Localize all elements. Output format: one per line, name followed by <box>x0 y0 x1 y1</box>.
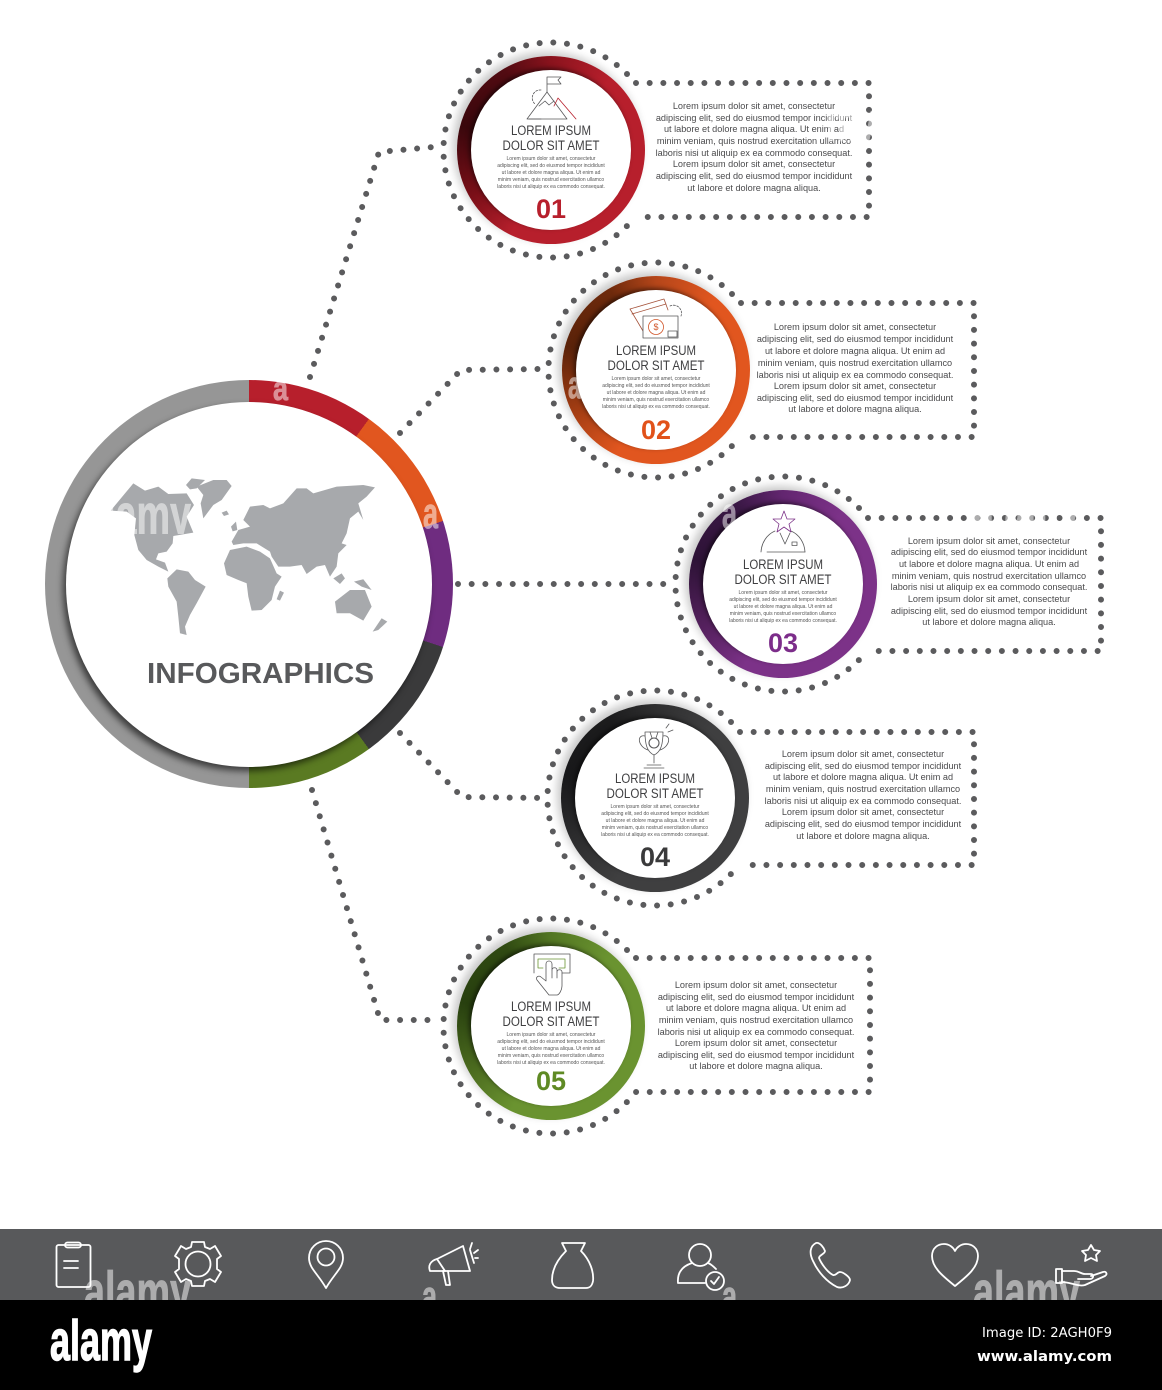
website: www.alamy.com <box>977 1349 1112 1365</box>
icon: phone <box>811 1243 850 1288</box>
icon: map pin <box>309 1241 343 1288</box>
side text 04 <box>765 749 962 841</box>
content 05 <box>497 954 855 1096</box>
title 05: LOREM IPSUM <box>511 999 591 1014</box>
description 05: ut labore et dolore magna aliqua. Ut enim ad <box>502 1046 601 1052</box>
watermarks on bar <box>84 1260 1080 1300</box>
title 01: LOREM IPSUM <box>511 123 591 138</box>
side text 05: minim veniam, quis nostrud exercitation ullamco <box>659 1015 853 1025</box>
side text 05: adipiscing elit, sed do eiusmod tempor incididunt <box>658 992 855 1002</box>
dotted outline 02 <box>546 260 977 480</box>
description 04: laboris nisi ut aliquip ex ea commodo consequat. <box>601 832 709 838</box>
centre 05 <box>471 946 631 1106</box>
watermark overlay: alamy <box>973 477 1080 541</box>
title 03: LOREM IPSUM <box>743 557 823 572</box>
title 05: DOLOR SIT AMET <box>502 1014 600 1029</box>
side text 03: ut labore et dolore magna aliqua. <box>922 617 1056 627</box>
content 01 <box>497 76 853 224</box>
hub title: INFOGRAPHICS <box>147 658 374 690</box>
side text 01: adipiscing elit, sed do eiusmod tempor incididunt <box>656 171 853 181</box>
watermark overlay: my <box>826 90 876 154</box>
number 05: 05 <box>536 1066 566 1096</box>
description 01 <box>497 156 605 190</box>
panel: step 05 <box>440 916 873 1136</box>
panel: central hub ring <box>45 380 453 788</box>
side text 03: laboris nisi ut aliquip ex ea commodo consequat. <box>891 582 1087 592</box>
description 05: adipiscing elit, sed do eiusmod tempor incididunt <box>497 1039 605 1045</box>
side text 04: laboris nisi ut aliquip ex ea commodo consequat. <box>765 796 961 806</box>
title 03 <box>734 557 832 587</box>
side text 02 <box>757 322 954 414</box>
side text 05: Lorem ipsum dolor sit amet, consectetur <box>675 1038 837 1048</box>
footer band <box>0 1300 1162 1390</box>
description 01: Lorem ipsum dolor sit amet, consectetur <box>507 156 596 162</box>
side text 04: ut labore et dolore magna aliqua. Ut enim ad <box>773 772 953 782</box>
icon: user with check <box>678 1244 724 1290</box>
ring 02 <box>562 276 750 464</box>
description 01: minim veniam, quis nostrud exercitation ullamco <box>498 177 604 183</box>
content 04 <box>601 724 962 872</box>
side text 02: Lorem ipsum dolor sit amet, consectetur <box>774 381 936 391</box>
icon: card and dollar <box>630 299 682 338</box>
description 02: ut labore et dolore magna aliqua. Ut enim ad <box>607 390 706 396</box>
bottom icon bar <box>0 1229 1162 1300</box>
icon: card and dollar: $ <box>653 322 659 332</box>
side text 05: ut labore et dolore magna aliqua. Ut enim ad <box>666 1003 846 1013</box>
dotted outline 04 <box>544 688 977 908</box>
side text 01: laboris nisi ut aliquip ex ea commodo consequat. <box>656 148 852 158</box>
description 02: adipiscing elit, sed do eiusmod tempor incididunt <box>602 383 710 389</box>
icon: money bag <box>552 1243 593 1288</box>
side text 03: ut labore et dolore magna aliqua. Ut enim ad <box>899 559 1079 569</box>
description 02: minim veniam, quis nostrud exercitation ullamco <box>603 397 709 403</box>
side text 01: ut labore et dolore magna aliqua. Ut enim ad <box>664 124 844 134</box>
side text 02: ut labore et dolore magna aliqua. Ut enim ad <box>765 346 945 356</box>
title 02: DOLOR SIT AMET <box>608 358 704 373</box>
icon: star and dome <box>761 511 805 552</box>
watermark overlay <box>111 110 1076 540</box>
content 03 <box>729 510 1088 658</box>
description 04: minim veniam, quis nostrud exercitation ullamco <box>602 825 708 831</box>
title 02 <box>608 343 704 373</box>
side text 02: minim veniam, quis nostrud exercitation ullamco <box>758 358 952 368</box>
bar icons <box>56 1240 1108 1291</box>
footer logo: alamy <box>50 1309 152 1373</box>
side text 01: ut labore et dolore magna aliqua. <box>687 183 821 193</box>
panel: step 03 <box>672 474 1104 694</box>
dotted outline 05 <box>440 916 873 1136</box>
title 04: LOREM IPSUM <box>615 771 695 786</box>
dotted outline 01 <box>440 40 872 260</box>
image id: Image ID: 2AGH0F9 <box>982 1326 1112 1341</box>
side text 01: minim veniam, quis nostrud exercitation ullamco <box>657 136 851 146</box>
icon: clipboard <box>56 1242 90 1287</box>
number 01: 01 <box>536 194 566 224</box>
centre 04 <box>575 718 735 878</box>
side text 01: Lorem ipsum dolor sit amet, consectetur <box>673 159 835 169</box>
side text 05: ut labore et dolore magna aliqua. <box>689 1061 823 1071</box>
description 04: ut labore et dolore magna aliqua. Ut enim ad <box>606 818 705 824</box>
ring 01 <box>457 56 645 244</box>
description 03: adipiscing elit, sed do eiusmod tempor incididunt <box>729 597 837 603</box>
centre 01 <box>471 70 631 230</box>
description 05: Lorem ipsum dolor sit amet, consectetur <box>507 1032 596 1038</box>
description 03: ut labore et dolore magna aliqua. Ut enim ad <box>734 604 833 610</box>
icon: hand on banknote <box>534 954 570 995</box>
side text 02: adipiscing elit, sed do eiusmod tempor incididunt <box>757 393 954 403</box>
ring 05 <box>457 932 645 1120</box>
number 03: 03 <box>768 628 798 658</box>
icon: megaphone <box>429 1243 478 1285</box>
icon: heart <box>932 1244 978 1286</box>
side text 02: laboris nisi ut aliquip ex ea commodo consequat. <box>757 370 953 380</box>
side text 01 <box>656 101 853 193</box>
side text 04: ut labore et dolore magna aliqua. <box>796 831 930 841</box>
hub white centre <box>66 402 432 767</box>
description 01: laboris nisi ut aliquip ex ea commodo consequat. <box>497 184 605 190</box>
description 01: ut labore et dolore magna aliqua. Ut enim ad <box>502 170 601 176</box>
description 03 <box>729 590 837 624</box>
panel: step 04 <box>544 688 977 908</box>
side text 04: adipiscing elit, sed do eiusmod tempor incididunt <box>765 819 962 829</box>
ring 03 <box>689 490 877 678</box>
side text 04: Lorem ipsum dolor sit amet, consectetur <box>782 807 944 817</box>
side text 05: laboris nisi ut aliquip ex ea commodo consequat. <box>658 1027 854 1037</box>
icon: hand with star <box>1056 1245 1106 1285</box>
centre 03 <box>703 504 863 664</box>
side text 03: Lorem ipsum dolor sit amet, consectetur <box>908 594 1070 604</box>
description 03: laboris nisi ut aliquip ex ea commodo consequat. <box>729 618 837 624</box>
side text 05 <box>658 980 855 1071</box>
title 04 <box>606 771 704 801</box>
title 03: DOLOR SIT AMET <box>734 572 832 587</box>
side text 03: Lorem ipsum dolor sit amet, consectetur <box>908 536 1070 546</box>
panel: step 02 <box>546 260 977 480</box>
watermark overlay: alamy <box>84 483 191 547</box>
icon: trophy <box>639 724 673 768</box>
side text 02: Lorem ipsum dolor sit amet, consectetur <box>774 322 936 332</box>
description 05: minim veniam, quis nostrud exercitation ullamco <box>498 1053 604 1059</box>
side text 02: adipiscing elit, sed do eiusmod tempor incididunt <box>757 334 954 344</box>
side text 04: adipiscing elit, sed do eiusmod tempor incididunt <box>765 761 962 771</box>
description 01: adipiscing elit, sed do eiusmod tempor incididunt <box>497 163 605 169</box>
title 01 <box>502 123 600 153</box>
description 04 <box>601 804 709 838</box>
number 04: 04 <box>640 842 670 872</box>
title 04: DOLOR SIT AMET <box>606 786 704 801</box>
description 03: minim veniam, quis nostrud exercitation ullamco <box>730 611 836 617</box>
description 02 <box>602 376 710 410</box>
watermark overlay: a <box>722 489 737 538</box>
side text 03 <box>891 536 1088 627</box>
description 02: laboris nisi ut aliquip ex ea commodo consequat. <box>602 404 710 410</box>
panel: step 01 <box>440 40 872 260</box>
icon: mountain flag <box>527 77 576 119</box>
watermark overlay: a <box>273 370 289 408</box>
side text 02: ut labore et dolore magna aliqua. <box>788 404 922 414</box>
side text 03: adipiscing elit, sed do eiusmod tempor incididunt <box>891 547 1088 557</box>
ring 04 <box>561 704 749 892</box>
side text 05: Lorem ipsum dolor sit amet, consectetur <box>675 980 837 990</box>
description 05 <box>497 1032 605 1066</box>
description 02: Lorem ipsum dolor sit amet, consectetur <box>612 376 701 382</box>
title 01: DOLOR SIT AMET <box>502 138 600 153</box>
dotted outline 03 <box>672 474 1104 694</box>
side text 04: Lorem ipsum dolor sit amet, consectetur <box>782 749 944 759</box>
watermark overlay: a <box>423 489 438 538</box>
description 03: Lorem ipsum dolor sit amet, consectetur <box>739 590 828 596</box>
side text 03: minim veniam, quis nostrud exercitation ullamco <box>892 571 1086 581</box>
side text 05: adipiscing elit, sed do eiusmod tempor incididunt <box>658 1050 855 1060</box>
centre 02 <box>576 290 736 450</box>
content 02 <box>602 298 954 445</box>
side text 04: minim veniam, quis nostrud exercitation ullamco <box>766 784 960 794</box>
description 04: adipiscing elit, sed do eiusmod tempor incididunt <box>601 811 709 817</box>
side text 01: Lorem ipsum dolor sit amet, consectetur <box>673 101 835 111</box>
description 04: Lorem ipsum dolor sit amet, consectetur <box>611 804 700 810</box>
number 02: 02 <box>641 415 671 445</box>
side text 03: adipiscing elit, sed do eiusmod tempor incididunt <box>891 606 1088 616</box>
icon: gear <box>175 1242 221 1286</box>
description 05: laboris nisi ut aliquip ex ea commodo consequat. <box>497 1060 605 1066</box>
watermark overlay: a <box>568 365 582 407</box>
title 02: LOREM IPSUM <box>616 343 696 358</box>
title 05 <box>502 999 600 1029</box>
side text 01: adipiscing elit, sed do eiusmod tempor incididunt <box>656 113 853 123</box>
